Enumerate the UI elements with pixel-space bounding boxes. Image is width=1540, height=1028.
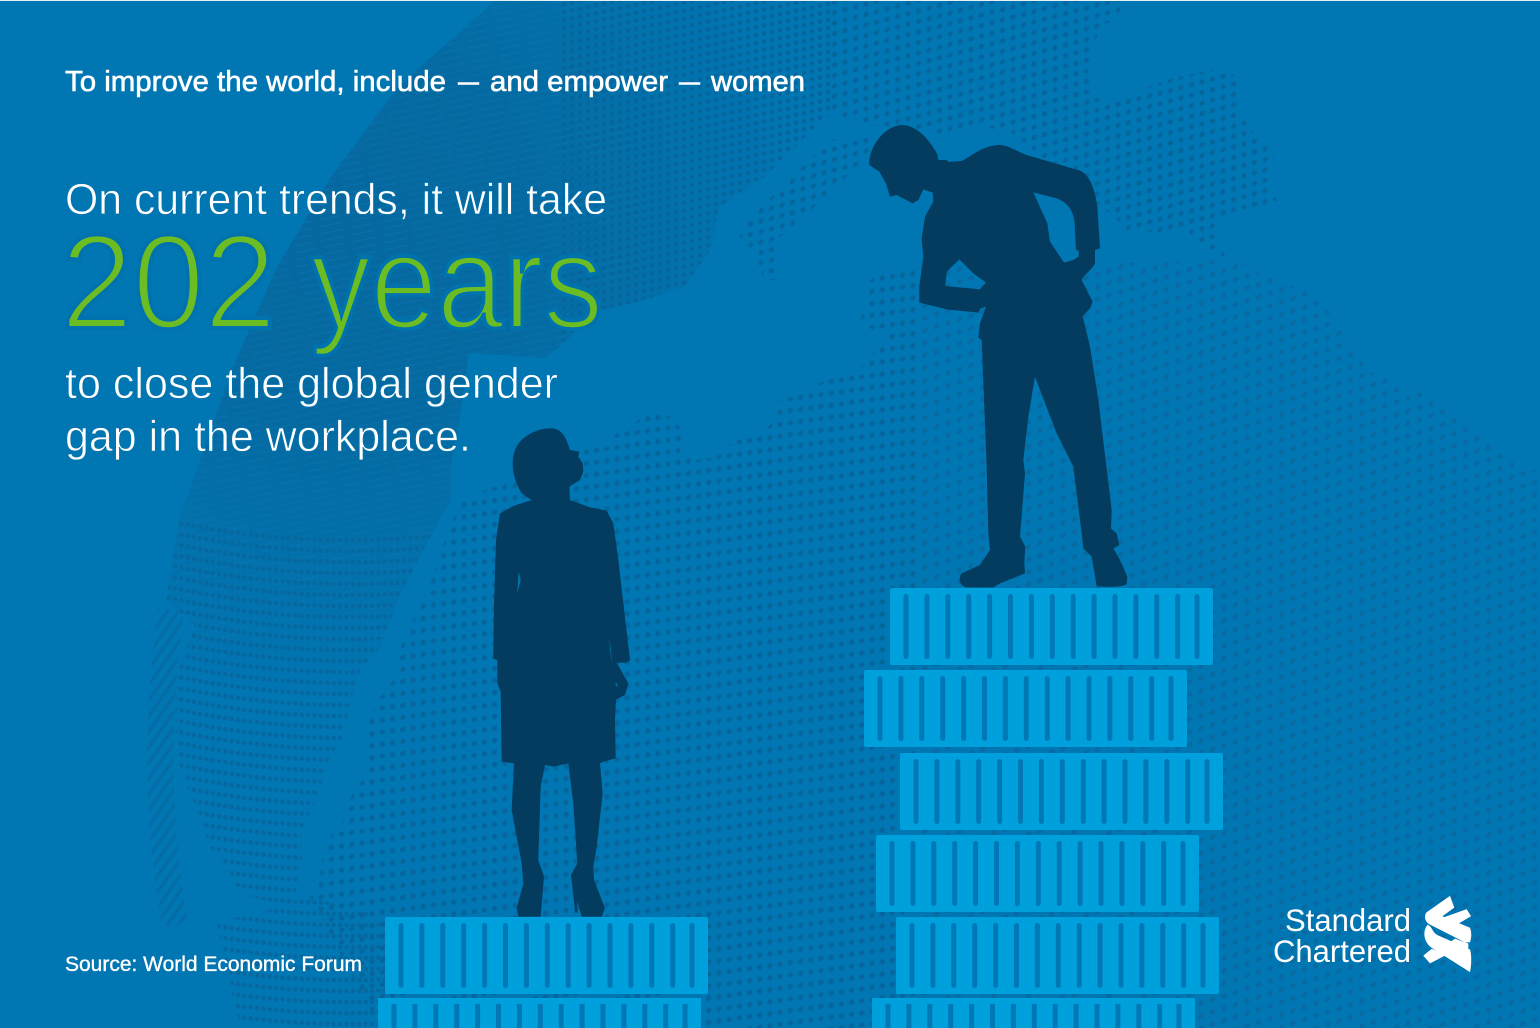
logo wordmark [1273, 902, 1411, 969]
top edge line [0, 0, 1540, 1]
crate stack under woman [378, 917, 708, 1028]
subtitle: women [710, 66, 805, 98]
globe limb sliver [160, 610, 175, 925]
man silhouette [869, 125, 1127, 587]
subtitle: — [458, 66, 479, 98]
lower dotted landmass [300, 250, 1540, 1028]
crate stack under man [864, 588, 1223, 1028]
curved latitude lines on left of globe [166, 522, 431, 1026]
crate 1 [385, 917, 708, 994]
logo wordmark: Standard [1285, 902, 1411, 938]
key figure: 202 years [61, 208, 603, 357]
crate 3 [900, 753, 1223, 830]
headline conclusion: gap in the workplace. [65, 413, 471, 461]
subtitle [65, 66, 805, 98]
key figure: 202 years: years [311, 208, 603, 357]
crate 2 [864, 670, 1187, 747]
source note: Source: World Economic Forum [65, 953, 362, 976]
subtitle: and empower [490, 66, 668, 98]
icon: Standard Chartered logo [1423, 896, 1471, 972]
crate 6 [872, 998, 1195, 1028]
headline conclusion: to close the global gender [65, 360, 558, 408]
key figure: 202 years: 202 [61, 208, 276, 357]
logo wordmark: Chartered [1273, 933, 1411, 969]
headline conclusion [65, 360, 558, 461]
subtitle: To improve the world, include [65, 66, 446, 98]
woman silhouette [493, 428, 630, 917]
crate 2 [378, 998, 701, 1028]
crate 5 [896, 917, 1219, 994]
crate 1 [890, 588, 1213, 665]
globe limb shading and upper landmass [181, 1, 1277, 560]
crate 4 [876, 835, 1199, 912]
subtitle: — [679, 66, 700, 98]
headline intro: On current trends, it will take [65, 176, 607, 224]
small dotted landmass [739, 138, 868, 280]
